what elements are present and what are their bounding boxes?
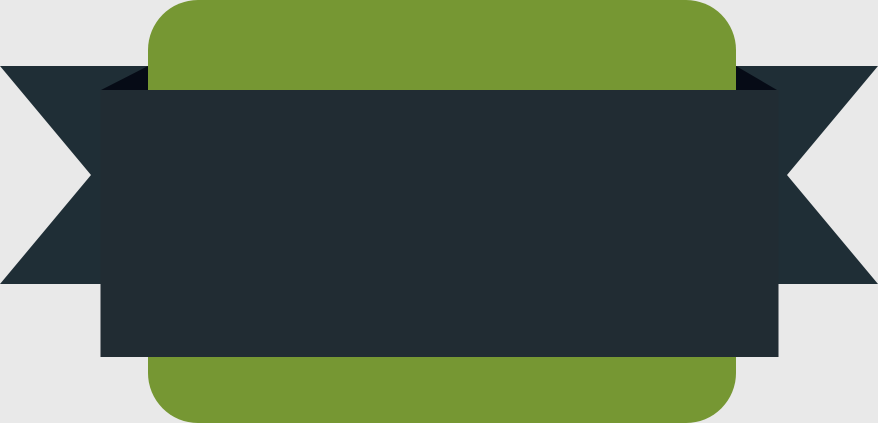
green rounded panel bbox=[148, 0, 736, 423]
left ribbon tail bbox=[0, 66, 148, 284]
central ribbon banner bbox=[100, 90, 778, 357]
right ribbon fold bbox=[736, 66, 777, 90]
right ribbon tail bbox=[736, 66, 878, 284]
left ribbon fold bbox=[101, 66, 148, 90]
